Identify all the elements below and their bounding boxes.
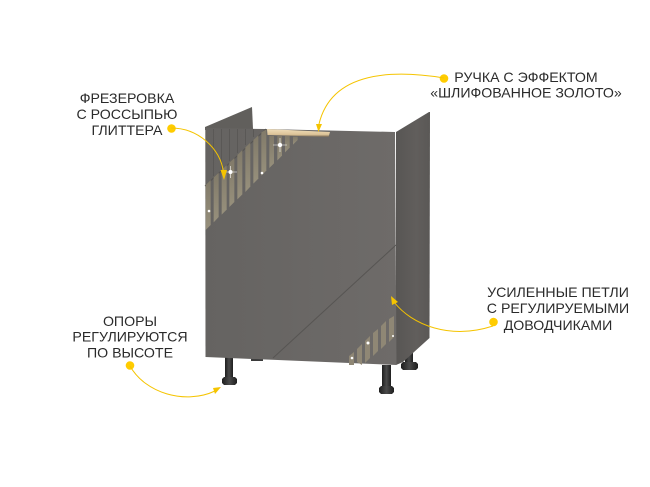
- front door: [205, 128, 396, 365]
- legs: [222, 350, 418, 394]
- handle: [267, 129, 330, 137]
- label: ОПОРЫ: [103, 313, 157, 329]
- label: ПО ВЫСОТЕ: [87, 344, 173, 360]
- label: РЕГУЛИРУЮТСЯ: [72, 328, 188, 344]
- label: С РОССЫПЬЮ: [77, 106, 177, 122]
- milled grooves top: [205, 129, 266, 186]
- arrow: [391, 296, 498, 331]
- label: ДОВОДЧИКАМИ: [504, 317, 612, 333]
- label: [77, 90, 177, 138]
- callout: legs: [72, 313, 221, 397]
- side panel: [396, 112, 430, 365]
- back left panel: [205, 107, 253, 130]
- label: РУЧКА С ЭФФЕКТОМ: [454, 69, 598, 85]
- label: [72, 313, 188, 360]
- arrow: [316, 74, 448, 132]
- label: [487, 284, 629, 333]
- callout: glitter milling: [77, 90, 227, 180]
- label: УСИЛЕННЫЕ ПЕТЛИ: [487, 284, 629, 300]
- label: С РЕГУЛИРУЕМЫМИ: [487, 300, 629, 316]
- sparkles top: [208, 138, 287, 212]
- label: ФРЕЗЕРОВКА: [80, 90, 175, 106]
- label: ГЛИТТЕРА: [92, 122, 163, 138]
- arrow: [167, 124, 227, 180]
- diagonal groove: [273, 245, 396, 358]
- cabinet: [205, 107, 430, 394]
- label: «ШЛИФОВАННОЕ ЗОЛОТО»: [430, 84, 622, 100]
- glitter stripes bottom: [349, 316, 394, 365]
- arrow: [126, 361, 221, 397]
- sparkles bottom: [351, 335, 394, 359]
- callout: handle: [316, 69, 622, 132]
- glitter stripes top: [206, 129, 298, 230]
- label: [430, 69, 622, 100]
- callout: hinges: [391, 284, 629, 333]
